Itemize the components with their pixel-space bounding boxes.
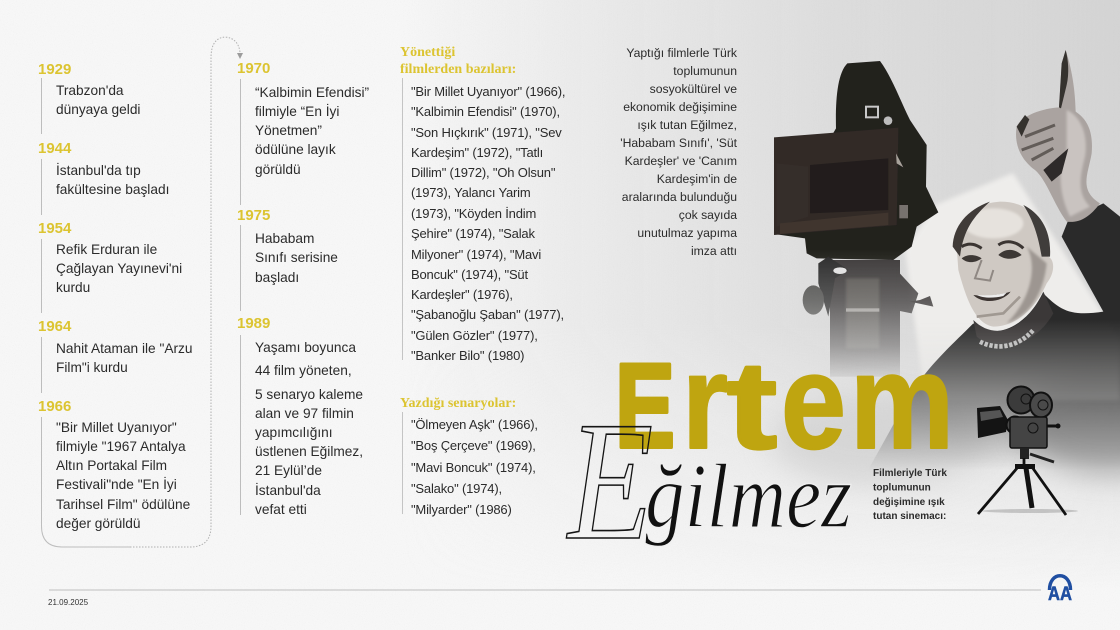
tagline: Filmleriyle Türk (873, 468, 947, 479)
screenplays text: "Mavi Boncuk" (1974), (411, 460, 536, 475)
intro paragraph: çok sayıda (679, 208, 737, 222)
intro paragraph: toplumunun (673, 64, 737, 78)
intro paragraph: ekonomik değişimine (623, 100, 737, 114)
1954 entry: Refik Erduran ile (56, 242, 157, 257)
directed films text: Boncuk" (1974), "Süt (411, 267, 528, 282)
screenplays text: "Boş Çerçeve" (1969), (411, 438, 536, 453)
film list (400, 45, 565, 363)
1964 entry: 1964 (38, 318, 72, 335)
icon: vintage film camera on tripod (977, 386, 1078, 515)
hand with pointing finger (1016, 50, 1100, 222)
1964 entry: Film"i kurdu (56, 360, 128, 375)
directed films text: "Son Hıçkırık" (1971), "Sev (411, 125, 562, 140)
date: 21.09.2025 (48, 598, 89, 607)
1929 entry: Trabzon'da (56, 83, 124, 98)
brows, eyes, mouth (962, 242, 1023, 248)
title: Ertem (615, 326, 954, 477)
1954 entry: Çağlayan Yayınevi'ni (56, 261, 182, 276)
photo: film camera on stand (774, 61, 938, 377)
1966 entry: Tarihsel Film" ödülüne (56, 497, 190, 512)
1944 entry: fakültesine başladı (56, 182, 169, 197)
1944 entry (38, 140, 169, 215)
1989 entry: yapımcılığını (255, 425, 333, 440)
title: Eğilmez script: E (566, 386, 653, 575)
heading: directed films: filmlerden bazıları: (400, 62, 516, 77)
footer rule (49, 590, 1041, 591)
tagline: tutan sinemacı: (873, 511, 946, 522)
directed films text: (1973), Yalancı Yarim (411, 185, 531, 200)
directed films text: Milyoner" (1974), "Mavi (411, 247, 541, 262)
title: Eğilmez script: ğilmez (645, 445, 852, 547)
directed films text: Kardeşler" (1976), (411, 287, 513, 302)
1929 entry: 1929 (38, 61, 71, 78)
1964 entry: Nahit Ataman ile "Arzu (56, 341, 192, 356)
directed films text: "Kalbimin Efendisi" (1970), (411, 104, 560, 119)
intro paragraph: sosyokültürel ve (650, 82, 737, 96)
1944 entry: İstanbul'da tıp (56, 163, 141, 178)
1970 entry: filmiyle “En İyi (255, 104, 339, 119)
photo: Ertem Eğilmez portrait (872, 50, 1120, 464)
timeline connector (42, 37, 243, 547)
1970 entry: 1970 (237, 60, 270, 77)
title: Ertem: m (850, 326, 954, 477)
photo: bright backdrop behind the director (905, 173, 1120, 400)
1964 entry (38, 318, 192, 393)
title: Eğilmez script (566, 386, 852, 575)
1989 entry: üstlenen Eğilmez, (255, 444, 363, 459)
1989 entry: alan ve 97 filmin (255, 406, 354, 421)
neck and collar (973, 292, 1053, 346)
1929 entry (38, 61, 140, 134)
1970 entry: “Kalbimin Efendisi” (255, 85, 370, 100)
1970 entry: Yönetmen” (255, 123, 322, 138)
1929 entry: dünyaya geldi (56, 102, 140, 117)
heading: directed films: Yönettiği (400, 45, 455, 60)
1954 entry (38, 220, 182, 313)
directed films text: (1973), "Köyden İndim (411, 206, 536, 221)
AA logo: AA (1048, 584, 1072, 605)
face (957, 202, 1053, 327)
background (434, 0, 1120, 570)
heading: screenplays: Yazdığı senaryolar: (400, 396, 516, 411)
screenplay list (400, 396, 538, 517)
screenplays text: "Milyarder" (1986) (411, 502, 512, 517)
1989 entry: 21 Eylül’de (255, 463, 322, 478)
title: Ertem: t (727, 337, 777, 475)
1966 entry: Altın Portakal Film (56, 458, 167, 473)
intro paragraph: Yaptığı filmlerle Türk (626, 46, 738, 60)
AA logo (1048, 576, 1072, 605)
hair (953, 202, 990, 257)
intro paragraph: unutulmaz yapıma (637, 226, 737, 240)
1989 entry: İstanbul'da (255, 483, 321, 498)
directed films text: Dillim" (1972), "Oh Olsun" (411, 165, 556, 180)
tagline: toplumunun (873, 482, 931, 494)
intro paragraph: aralarında bulunduğu (622, 190, 737, 204)
screenplays text: "Ölmeyen Aşk" (1966), (411, 417, 538, 432)
1954 entry: 1954 (38, 220, 72, 237)
1970 entry: ödülüne layık (255, 142, 336, 157)
1970 entry (237, 60, 370, 205)
1944 entry: 1944 (38, 140, 72, 157)
1989 entry: 1989 (237, 315, 270, 332)
intro paragraph: Kardeşim'in de (657, 172, 737, 186)
intro paragraph: ışık tutan Eğilmez, (637, 118, 737, 132)
intro paragraph: Kardeşler' ve 'Canım (625, 154, 737, 168)
screenplays text: "Salako" (1974), (411, 481, 502, 496)
1975 entry: Hababam (255, 231, 314, 246)
1989 entry: 5 senaryo kaleme (255, 387, 363, 402)
directed films text: Kardeşim" (1972), "Tatlı (411, 145, 543, 160)
directed films text: "Gülen Gözler" (1977), (411, 328, 538, 343)
title: Ertem: e (781, 326, 846, 477)
1975 entry: Sınıfı serisine (255, 250, 338, 265)
1966 entry (38, 398, 190, 531)
1989 entry: vefat etti (255, 502, 307, 517)
1966 entry: "Bir Millet Uyanıyor" (56, 420, 177, 435)
1966 entry: Festivali"nde "En İyi (56, 477, 177, 492)
1970 entry: görüldü (255, 162, 301, 177)
1975 entry: 1975 (237, 207, 270, 224)
intro paragraph: imza attı (691, 244, 737, 258)
1966 entry: değer görüldü (56, 516, 140, 531)
timeline column 2 (237, 60, 370, 517)
directed films text: "Banker Bilo" (1980) (411, 348, 524, 363)
1989 entry: Yaşamı boyunca (255, 340, 356, 355)
directed films text: "Bir Millet Uyanıyor" (1966), (411, 84, 565, 99)
1989 entry: 44 film yöneten, (255, 363, 352, 378)
1954 entry: kurdu (56, 280, 90, 295)
title: Ertem: r (682, 326, 728, 477)
sweater and raised arm (853, 203, 1120, 497)
1975 entry: başladı (255, 270, 299, 285)
timeline column 1 (38, 61, 192, 531)
1966 entry: 1966 (38, 398, 71, 415)
tagline: değişimine ışık (873, 497, 945, 508)
1966 entry: filmiyle "1967 Antalya (56, 439, 186, 454)
1989 entry (237, 315, 363, 517)
directed films text: Şehire" (1974), "Salak (411, 226, 535, 241)
directed films text: "Şabanoğlu Şaban" (1977), (411, 307, 564, 322)
intro paragraph: 'Hababam Sınıfı', 'Süt (620, 136, 738, 150)
title: Ertem: E (615, 339, 675, 473)
1975 entry (237, 207, 338, 311)
